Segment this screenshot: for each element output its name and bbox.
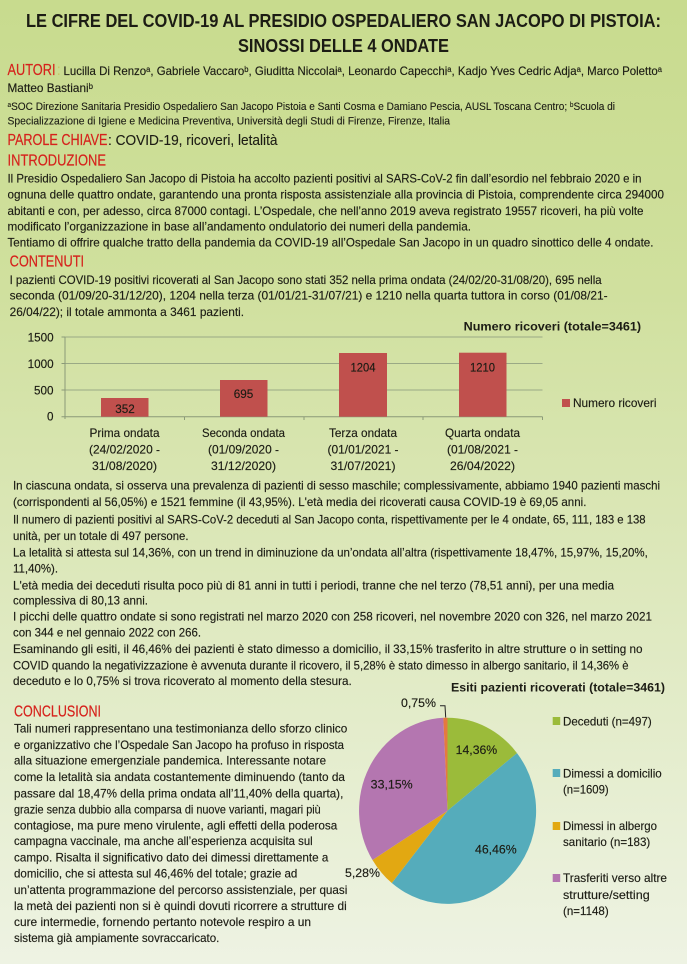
pie legend: Dimessi in albergo xyxy=(563,819,657,833)
text block: risultati xyxy=(13,478,660,688)
category labels: (01/01/2021 - xyxy=(328,442,398,456)
pie labels: 0,75% xyxy=(401,696,436,710)
text block: introduzione xyxy=(8,171,664,250)
y axis labels: 1500 xyxy=(28,331,54,345)
category labels: (24/02/2020 - xyxy=(89,442,160,456)
y axis labels xyxy=(28,331,54,424)
bar values xyxy=(115,361,495,416)
authors: b xyxy=(244,65,249,74)
text block: conclusioni: e organizzativo che l’Ospedale San Jacopo ha profuso in risposta xyxy=(14,738,344,752)
leader line xyxy=(440,706,446,718)
text block: contenuti xyxy=(10,273,608,319)
pie labels xyxy=(345,696,517,880)
text block: risultati: (corrispondenti al 56,05%) e 1521 femmine (il 43,95%). L'età media dei ricoverati causa COVID-19 è 69,05 anni. xyxy=(13,495,586,509)
bar values: 695 xyxy=(234,387,254,401)
category labels: Prima ondata xyxy=(90,426,160,440)
authors: a xyxy=(338,65,342,74)
category labels: 31/07/2021) xyxy=(330,459,396,473)
text block: risultati: complessiva di 80,13 anni. xyxy=(13,594,148,608)
text block: conclusioni: un’attenta programmazione del percorso assistenziale, per quasi xyxy=(14,883,347,897)
text block: risultati: COVID quando la negativizzazione è avvenuta durante il ricovero, il 5,28% è stato dimesso in albergo sanitario, il 14,36% è xyxy=(13,658,629,672)
text block: conclusioni: grazie senza dubbio alla comparsa di nuove varianti, magari più xyxy=(14,802,321,816)
text block: conclusioni: alla situazione emergenziale pandemica. Interessante notare xyxy=(14,754,326,768)
text block: contenuti: 26/04/22); il totale ammonta a 3461 pazienti. xyxy=(10,305,244,319)
bar values: 1204 xyxy=(350,361,376,375)
authors: a xyxy=(146,65,151,74)
title xyxy=(26,10,661,56)
category labels: Seconda ondata xyxy=(202,426,285,440)
slice: dimessi a domicilio xyxy=(392,753,536,904)
pie legend: (n=1609) xyxy=(563,782,609,796)
authors: a xyxy=(577,65,581,74)
category labels: (01/09/2020 - xyxy=(208,442,279,456)
keywords: PAROLE CHIAVE xyxy=(8,132,108,149)
authors: , Marco Poletto xyxy=(581,64,658,78)
authors: AUTORI xyxy=(8,62,56,79)
pie title: Esiti pazienti ricoverati (totale=3461) xyxy=(451,681,665,695)
pie legend: (n=1148) xyxy=(563,904,609,918)
category labels: 31/12/2020) xyxy=(211,459,276,473)
pie chart: esiti pazienti ricoverati xyxy=(345,681,667,918)
text block: conclusioni xyxy=(14,722,348,945)
affiliations: a xyxy=(8,102,11,109)
category labels: Quarta ondata xyxy=(445,426,520,440)
title: SINOSSI DELLE 4 ONDATE xyxy=(238,35,449,56)
pie legend: Dimessi a domicilio xyxy=(563,766,662,780)
bars xyxy=(101,353,506,417)
affiliations: b xyxy=(570,102,574,109)
authors: Lucilla Di Renzo xyxy=(64,64,150,78)
pie legend xyxy=(553,714,667,918)
authors: a xyxy=(658,65,663,74)
pie legend: strutture/setting xyxy=(563,888,650,902)
authors: Matteo Bastiani xyxy=(8,81,90,95)
chart legend: Numero ricoveri xyxy=(573,396,656,410)
pie labels: 46,46% xyxy=(475,843,517,857)
heading: introduzione: INTRODUZIONE xyxy=(8,152,106,170)
bar values: 352 xyxy=(115,402,135,416)
affiliations: SOC Direzione Sanitaria Presidio Ospedaliero San Jacopo Pistoia e Santi Cosma e Damiano Pescia, AUSL Toscana Centro; xyxy=(11,101,570,113)
bar values: 1210 xyxy=(470,361,495,375)
text block: conclusioni: Tali numeri rappresentano una testimonianza dello sforzo clinico xyxy=(14,722,348,736)
authors: : xyxy=(56,62,61,79)
text block: conclusioni: la metà dei pazienti non si è quindi dovuti ricorrere a strutture di xyxy=(14,899,347,913)
category labels: Terza ondata xyxy=(329,426,397,440)
affiliations xyxy=(8,101,615,128)
pie labels: 5,28% xyxy=(345,866,380,880)
text block: risultati: In ciascuna ondata, si osserva una prevalenza di pazienti di sesso maschile; complessivamente, abbiamo 1940 pazienti maschi xyxy=(13,478,660,492)
category labels: (01/08/2021 - xyxy=(447,442,518,456)
authors: , Gabriele Vaccaro xyxy=(150,64,245,78)
heading: conclusioni: CONCLUSIONI xyxy=(14,704,101,721)
text block: conclusioni: cure intermedie, fornendo pertanto notevole respiro a un xyxy=(14,915,311,929)
text block: risultati: con 344 e nel gennaio 2022 con 266. xyxy=(13,626,201,640)
category labels: 26/04/2022) xyxy=(450,459,515,473)
text block: risultati: L'età media dei deceduti risulta poco più di 81 anni in tutti i periodi, tranne che nel terzo (78,51 anni), per una media xyxy=(13,578,614,592)
text block: introduzione: modificato l’organizzazione in base all’andamento ondulatorio dei numeri della pandemia. xyxy=(8,220,471,234)
chart title: Numero ricoveri (totale=3461) xyxy=(464,320,641,334)
text block: risultati: 11,40%). xyxy=(13,562,58,576)
text block: contenuti: I pazienti COVID-19 positivi ricoverati al San Jacopo sono stati 352 nella prima ondata (24/02/20-31/08/20), 695 nella xyxy=(10,273,602,287)
pie legend: sanitario (n=183) xyxy=(563,835,650,849)
category labels xyxy=(89,426,520,473)
text block: conclusioni: campo. Risalta il significativo dato dei dimessi direttamente a xyxy=(14,850,329,864)
keywords: : COVID-19, ricoveri, letalità xyxy=(108,133,278,149)
bar chart: numero ricoveri xyxy=(28,320,657,473)
text block: risultati: deceduto e lo 0,75% si trova ricoverato al momento della stesura. xyxy=(13,674,352,688)
text block: conclusioni: sistema già ampiamente sovraccaricato. xyxy=(14,931,219,945)
authors: , Kadjo Yves Cedric Adja xyxy=(452,64,577,78)
y axis labels: 0 xyxy=(47,410,54,424)
heading: contenuti: CONTENUTI xyxy=(10,254,84,271)
authors xyxy=(8,62,663,95)
text block: contenuti: seconda (01/09/20-31/12/20), 1204 nella terza (01/01/21-31/07/21) e 1210 nella quarta tuttora in corso (01/08/21- xyxy=(10,288,608,302)
pie labels: 14,36% xyxy=(456,743,498,757)
authors: a xyxy=(447,65,452,74)
text block: conclusioni: domicilio, che si attesta sul 46,46% del totale; grazie ad xyxy=(14,867,297,881)
text block: risultati: La letalità si attesta sul 14,36%, con un trend in diminuzione da un’ondata all’altra (rispettivamente 18,47%, 15,97%, 15,20%, xyxy=(13,546,648,560)
keywords xyxy=(8,132,278,149)
authors: , Leonardo Capecchi xyxy=(342,64,447,78)
text block: introduzione: Il Presidio Ospedaliero San Jacopo di Pistoia ha accolto pazienti positivi al SARS-CoV-2 fin dall’esordio nel febbraio 2020 e in xyxy=(8,171,642,185)
text block: conclusioni: passare dal 18,47% della prima ondata all’11,40% della quarta), xyxy=(14,786,343,800)
affiliations: Scuola di xyxy=(574,101,615,113)
text block: risultati: unità, per un totale di 497 persone. xyxy=(13,529,188,543)
y axis labels: 500 xyxy=(34,384,54,398)
text block: risultati: Esaminando gli esiti, il 46,46% dei pazienti è stato dimesso a domicilio, il 33,15% trasferito in altre strutture o in setting no xyxy=(13,642,643,656)
pie labels: 33,15% xyxy=(371,778,413,792)
slice: ricoverati xyxy=(443,718,448,811)
text block: introduzione: Tentiamo di offrire qualche tratto della pandemia da COVID-19 all’Ospedale San Jacopo in un quadro sinottico delle 4 ondate. xyxy=(8,236,654,250)
text block: introduzione: ognuna delle quattro ondate, garantendo una pronta risposta assistenziale alla provincia di Pistoia, comprendente circa 294000 xyxy=(8,188,664,202)
y axis labels: 1000 xyxy=(28,357,54,371)
pie legend: Deceduti (n=497) xyxy=(563,714,652,728)
text block: risultati: Il numero di pazienti positivi al SARS-CoV-2 deceduti al San Jacopo conta, rispettivamente per le 4 ondate, 65, 111, 183 e 138 xyxy=(13,512,646,526)
text block: introduzione: abitanti e con, per adesso, circa 87000 contagi. L’Ospedale, che nell’anno 2019 aveva registrato 19557 ricoveri, ha più volte xyxy=(8,204,644,218)
text block: conclusioni: come la letalità sia andata costantemente diminuendo (tanto da xyxy=(14,770,345,784)
authors: b xyxy=(89,82,94,91)
affiliations: Specializzazione di Igiene e Medicina Preventiva, Università degli Studi di Firenze, Firenze, Italia xyxy=(8,116,451,128)
authors: , Giuditta Niccolai xyxy=(249,64,338,78)
pie legend: Trasferiti verso altre xyxy=(563,871,667,885)
text block: risultati: I picchi delle quattro ondate si sono registrati nel marzo 2020 con 258 ricoveri, nel novembre 2020 con 326, nel marzo 2021 xyxy=(13,610,652,624)
text block: conclusioni: campagna vaccinale, ma anche all’esperienza acquisita sul xyxy=(14,834,313,848)
slice: dimessi in albergo sanitario xyxy=(372,811,448,883)
category labels: 31/08/2020) xyxy=(92,459,157,473)
text block: conclusioni: contagiose, ma pure meno virulente, agli effetti della poderosa xyxy=(14,818,338,832)
slice: trasferiti xyxy=(359,718,448,860)
slice: deceduti xyxy=(448,718,517,811)
